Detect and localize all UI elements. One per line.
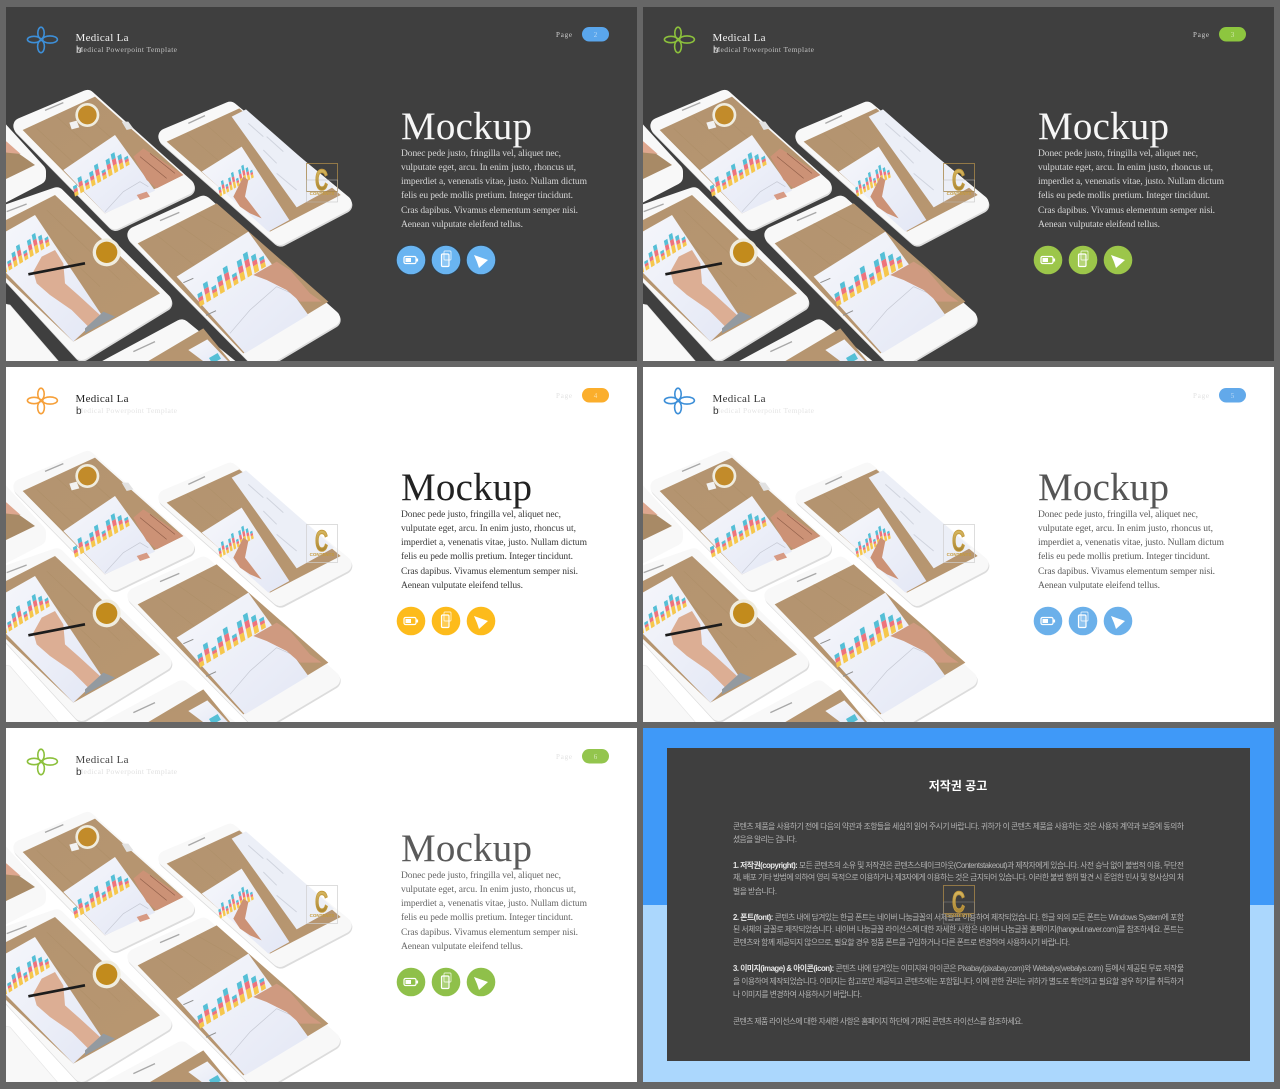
body text: Donec pede justo, fringilla vel, aliquet nec, <box>401 509 561 520</box>
copyright clause <box>733 860 1184 896</box>
phone mockups <box>0 819 344 1089</box>
body text: felis eu pede mollis pretium. Integer tincidunt. <box>401 190 573 201</box>
header title: Medical La <box>76 393 129 405</box>
body text: vulputate eget, arcu. In enim justo, rhoncus ut, <box>401 163 576 173</box>
body text: felis eu pede mollis pretium. Integer tincidunt. <box>1038 190 1210 201</box>
watermark badge: CONTENTS <box>947 191 971 196</box>
icon circles <box>397 607 495 635</box>
watermark badge <box>306 886 338 924</box>
body text: Aenean vulputate eleifend tellus. <box>401 219 523 230</box>
body text: imperdiet a, venenatis vitae, justo. Nullam dictum <box>401 177 588 187</box>
font clause <box>733 912 1184 947</box>
body text: Donec pede justo, fringilla vel, aliquet nec, <box>1038 148 1198 159</box>
logo icon <box>664 27 694 53</box>
phone mockups <box>0 458 344 739</box>
notice heading: 저작권 공고 <box>929 778 987 793</box>
icon circles <box>397 968 495 996</box>
icon circles <box>1034 246 1132 274</box>
body text: Cras dapibus. Vivamus elementum semper nisi. <box>1038 206 1215 216</box>
watermark badge <box>944 886 974 924</box>
header subtitle: b <box>76 406 82 417</box>
heading: Mockup <box>401 105 532 148</box>
watermark badge: CONTENTS <box>947 552 971 557</box>
body text: vulputate eget, arcu. In enim justo, rhoncus ut, <box>1038 524 1213 534</box>
body text: imperdiet a, venenatis vitae, justo. Nullam dictum <box>401 538 588 548</box>
header title: Medical La <box>712 32 766 44</box>
body text: felis eu pede mollis pretium. Integer tincidunt. <box>401 912 573 923</box>
notice intro: 콘텐츠 제품을 사용하기 전에 다음의 약관과 조항들을 세심히 읽어 주시기 바랍니다. 귀하가 이 콘텐츠 제품을 사용하는 것은 사용자 계약과 보증에 동의하 <box>733 821 1184 831</box>
slide 2: dark slide with blue accent <box>0 7 637 378</box>
body text: Aenean vulputate eleifend tellus. <box>1038 580 1160 591</box>
copyright clause: 재, 배포 기타 방법에 의하여 영리 목적으로 이용하거나 제3자에게 이용하는 것은 금지되어 있습니다. 이러한 불법 행위 발견 시 준엄한 민사 및 형사상의 처 <box>733 872 1184 882</box>
page pill: 3 <box>1231 31 1235 39</box>
license note: 콘텐츠 제품 라이선스에 대한 자세한 사항은 홈페이지 하단에 기재된 콘텐츠 라이선스를 참조하세요. <box>733 1016 1023 1026</box>
header subtitle: b <box>76 45 82 56</box>
image and icon clause: 3. 이미지(image) & 아이콘(icon): 콘텐츠 내에 담겨있는 이미지와 아이콘은 Pixabay(pixabay.com)와 Webalys(webalys.com) 등에서 제공된 무료 저작물 <box>733 963 1184 973</box>
body text: Cras dapibus. Vivamus elementum semper nisi. <box>401 928 578 938</box>
watermark badge: CONTENTS <box>310 552 334 557</box>
body text <box>401 509 588 591</box>
page label: Page <box>556 392 572 400</box>
heading: Mockup <box>1038 466 1169 509</box>
watermark badge: C <box>315 886 328 919</box>
header title: Medical La <box>76 754 129 766</box>
header subtitle: Medical Powerpoint Template <box>76 767 178 776</box>
watermark badge: C <box>315 164 328 197</box>
image and icon clause <box>733 963 1184 999</box>
copyright clause: 벌을 받습니다. <box>733 886 777 896</box>
watermark badge <box>306 164 338 202</box>
body text: felis eu pede mollis pretium. Integer tincidunt. <box>401 551 573 562</box>
header title: Medical La <box>712 393 766 405</box>
watermark badge: C <box>315 525 328 558</box>
font clause: 2. 폰트(font): 콘텐츠 내에 담겨있는 한글 폰트는 네이버 나눔글꼴의 서체들을 이용하여 제작되었습니다. 한글 외의 모든 폰트는 Windows System에 포함 <box>733 912 1184 922</box>
page pill: 4 <box>594 392 598 400</box>
page pill: 5 <box>1231 392 1235 400</box>
slide 6: white slide with green accent <box>0 728 637 1089</box>
watermark badge: CONTENTS <box>310 913 334 918</box>
heading: Mockup <box>401 827 532 870</box>
watermark badge <box>306 524 338 562</box>
body text: imperdiet a, venenatis vitae, justo. Nullam dictum <box>401 899 588 909</box>
slide 3: dark slide with green accent <box>643 7 1274 361</box>
two-tone blue backdrop <box>643 728 1274 1082</box>
logo icon <box>664 388 694 414</box>
heading: Mockup <box>401 466 532 509</box>
body text: Aenean vulputate eleifend tellus. <box>401 941 523 952</box>
body text: imperdiet a, venenatis vitae, justo. Nullam dictum <box>1038 538 1225 548</box>
image and icon clause: 나 이미지를 변경하여 사용하시기 바랍니다. <box>733 989 862 999</box>
body text: imperdiet a, venenatis vitae, justo. Nullam dictum <box>1038 177 1225 187</box>
watermark badge <box>944 524 974 562</box>
image and icon clause: 을 이용하여 제작되었습니다. 이미지는 참고로만 제공되고 콘텐츠에는 포함됩니다. 이에 관한 권리는 귀하가 별도로 확인하고 필요할 경우 허가를 취득하거 <box>733 976 1184 986</box>
body text: vulputate eget, arcu. In enim justo, rhoncus ut, <box>401 524 576 534</box>
body text: Donec pede justo, fringilla vel, aliquet nec, <box>401 148 561 159</box>
body text: Cras dapibus. Vivamus elementum semper nisi. <box>1038 567 1215 577</box>
icon circles <box>1034 607 1132 635</box>
logo icon <box>27 388 57 414</box>
body text: Cras dapibus. Vivamus elementum semper nisi. <box>401 567 578 577</box>
header subtitle: Medical Powerpoint Template <box>714 406 815 415</box>
copyright clause: 1. 저작권(copyright): 모든 콘텐츠의 소유 및 저작권은 콘텐츠스테이크아웃(Contentstakeout)과 제작자에게 있습니다. 사전 승낙 없이 불법적 이용, 무단전 <box>733 860 1184 870</box>
phone mockups <box>0 97 344 378</box>
font clause: 콘텐츠와 함께 제공되지 않으므로, 필요할 경우 정품 폰트를 구입하거나 다른 폰트로 변경하여 사용하시기 바랍니다. <box>733 937 1070 947</box>
phone mockups <box>604 97 981 378</box>
body text: vulputate eget, arcu. In enim justo, rhoncus ut, <box>1038 163 1213 173</box>
header subtitle: b <box>713 45 719 56</box>
logo icon <box>27 27 57 53</box>
body text: Donec pede justo, fringilla vel, aliquet nec, <box>1038 509 1198 520</box>
header subtitle: b <box>76 767 82 778</box>
body text <box>401 870 588 952</box>
header subtitle: b <box>713 406 719 417</box>
body text: Aenean vulputate eleifend tellus. <box>401 580 523 591</box>
body text: Cras dapibus. Vivamus elementum semper nisi. <box>401 206 578 216</box>
page pill <box>582 27 609 42</box>
page pill <box>1219 388 1246 402</box>
watermark badge: CONTENTS <box>946 913 971 918</box>
header title: Medical La <box>76 32 129 44</box>
header subtitle: Medical Powerpoint Template <box>76 406 178 415</box>
notice intro: 셨음을 알리는 겁니다. <box>733 834 797 844</box>
body text <box>1038 148 1225 230</box>
body text: vulputate eget, arcu. In enim justo, rhoncus ut, <box>401 885 576 895</box>
watermark badge: C <box>952 164 965 197</box>
notice intro <box>733 821 1184 844</box>
body text <box>1038 509 1225 591</box>
page label: Page <box>556 31 572 39</box>
watermark badge <box>944 164 974 202</box>
heading: Mockup <box>1038 105 1169 148</box>
page pill <box>582 388 609 402</box>
watermark badge: C <box>952 886 965 919</box>
page label: Page <box>1193 392 1209 400</box>
dark notice card <box>667 748 1250 1061</box>
page label: Page <box>556 753 572 761</box>
page pill: 6 <box>594 753 598 761</box>
logo icon <box>27 749 57 775</box>
watermark badge: CONTENTS <box>310 191 334 196</box>
body text: Aenean vulputate eleifend tellus. <box>1038 219 1160 230</box>
body text: felis eu pede mollis pretium. Integer tincidunt. <box>1038 551 1210 562</box>
page label: Page <box>1193 31 1209 39</box>
slide 5: white slide with blue accent <box>643 367 1274 722</box>
panel: copyright notice <box>643 728 1274 1082</box>
slide 4: white slide with orange accent <box>0 367 637 739</box>
font clause: 된 서체의 글꼴로 제작되었습니다. 네이버 나눔글꼴 라이선스에 대한 자세한 사항은 네이버 나눔글꼴 홈페이지(hangeul.naver.com)를 참조하세요. 폰트는 <box>733 924 1184 934</box>
header subtitle: Medical Powerpoint Template <box>76 45 178 54</box>
watermark badge: C <box>952 525 965 558</box>
body text: Donec pede justo, fringilla vel, aliquet nec, <box>401 870 561 881</box>
page pill <box>582 749 609 764</box>
icon circles <box>396 244 496 276</box>
phone mockups <box>604 458 981 739</box>
page pill <box>1219 27 1246 42</box>
body text <box>401 148 588 230</box>
page pill: 2 <box>594 31 598 39</box>
header subtitle: Medical Powerpoint Template <box>714 45 815 54</box>
